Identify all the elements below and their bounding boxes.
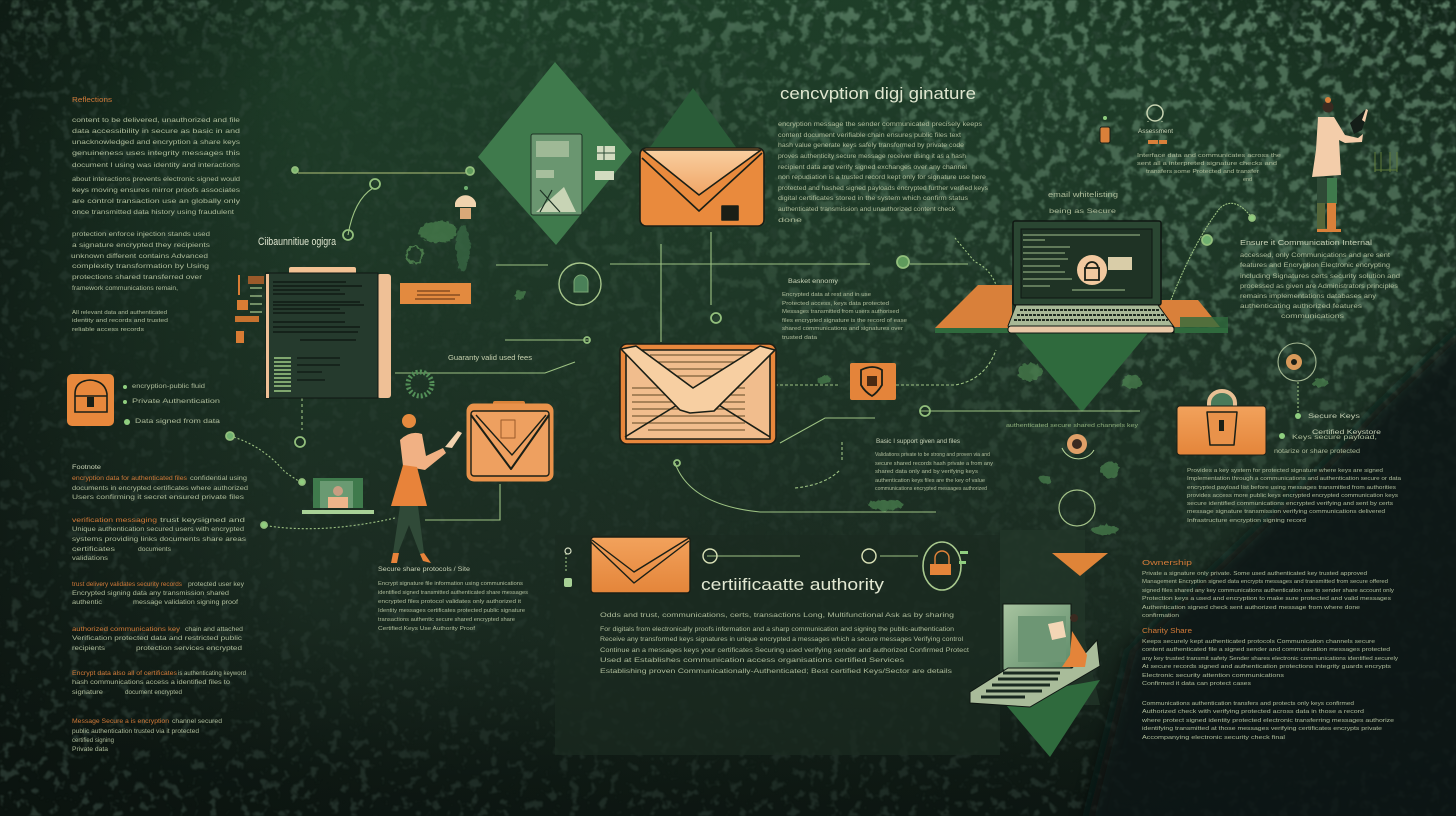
text block: left lower list: Encrypted signing data any transmission shared [72,591,229,597]
text block: right lower: any key trusted transmit safety Sender shares electronic communications identified securely [1142,656,1398,662]
text block: center signature [875,439,994,492]
lower envelope [591,537,690,593]
text block: right lower: Authentication signed check sent authorized message from where done [1142,605,1360,611]
text block: certificate authority body: For digitals from electronically proofs information and a sharp communication and signing the public-authentication [600,627,954,633]
text block: left woman caption: Secure share protocols / Site [378,567,471,573]
text block: intro: document I using was identity and interactions [72,163,240,169]
big padlock [1177,391,1266,455]
icon: small lamp [455,186,476,219]
text block: intro: protection enforce injection stands used [72,232,210,238]
orange box in left panel [400,283,471,304]
text block: left lower list: channel secured [172,719,222,725]
text block: small center: trusted data [782,335,817,341]
heading: panel title: Ciibaunnitiue ogigra [258,236,337,248]
text block: top right small: Interface data and communicates across the [1137,153,1281,159]
big green diamond [478,62,632,245]
lower laptop with reader [970,604,1100,707]
text block: left lower list: verification messaging [72,518,157,524]
text block: left lower list: encryption data for authenticated files [72,476,187,482]
text block: intro [71,97,241,333]
text block: left lower list: Users confirming it secret ensured private files [72,495,244,501]
text block: right lower: confirmation [1142,613,1179,619]
text block: connector label: Guaranty valid used fees [448,355,533,362]
text block: right lower [1141,560,1398,741]
text block: left lower list: protected user key [188,582,244,588]
text block: top right small [1137,129,1281,183]
text block: intro: genuineness uses integrity messages this [72,151,240,157]
text block: left woman caption: Certified Keys Use Authority Proof [378,626,476,632]
text block: certificate authority body: Used at Establishes communication access organisations certified Services [600,658,904,664]
text block: certificate authority body: Odds and trust, communications, certs, transactions Long, Multifunctional Ask as by sharing [600,613,954,619]
text block: intro: are control transaction use an globally only [72,199,240,205]
text block: right padlock below: message signature transmission verifying communications delivered [1187,509,1385,515]
text block: left woman caption [378,567,528,632]
text block: right padlock below: Infrastructure encryption signing record [1187,518,1306,524]
text block: center signature: Validations private to be strong and proven via and [875,452,990,458]
text block: small center: Basket ennomy [788,278,839,285]
text block: right lower: content authenticated file a signed sender and communication messages protected [1142,647,1390,653]
text block: small center: Protected access, keys data protected [782,301,889,307]
text block: intro: content to be delivered, unauthorized and file [72,118,241,124]
text block: left woman caption: identified signed transmitted authenticated share messages [378,590,528,596]
top envelope [640,148,764,226]
icon: orange lock left [67,374,114,426]
text block: small center: Messages transmitted from users authorised [782,309,899,315]
text block: right middle: authenticating authorized features [1240,304,1362,310]
right woman figure [1312,97,1397,232]
laptop caption [1048,192,1118,215]
text block: right lower: identifying transmitted at those messages verifying certificates encrypts private [1142,726,1382,732]
text block: encryption digital signature body [778,122,988,224]
connector nodes [226,167,1255,528]
text block: right lower: Private a signature only private. Some used authenticated key trusted approved [1142,571,1367,577]
text block: intro: identity and records and trusted [72,318,168,324]
heading: certificate authority: certiificaatte authority [701,575,885,594]
text block: left woman caption: transactions authentic secure shared encrypted share [378,617,515,623]
center envelope [620,344,776,444]
text block: left lower list: Private data [72,747,109,753]
suitcase envelope [467,401,553,481]
text block: left lower list: trust keysigned and [160,518,245,524]
text block: right lower: Accompanying electronic security check final [1142,735,1285,741]
text block: encryption digital signature body: proves authenticity secure message receiver using it as a hash [778,154,966,160]
document panel [235,267,391,398]
legend text by lock: Data signed from data [135,419,221,425]
text block: intro: Reflections [72,97,113,104]
text block: right middle: features and Encryption Electronic encrypting [1240,263,1390,269]
laptop caption: email whitelisting [1048,192,1118,199]
small monitor with person [302,478,374,514]
text block: left lower list: document encrypted [125,690,182,696]
text block: small center: Encrypted data at rest and in use [782,292,871,298]
lower green diamond [1000,680,1100,757]
text block: left lower list: public authentication trusted via it protected [72,729,199,735]
caption by padlock: notarize or share protected [1274,449,1360,455]
orange triangle marker [1052,553,1108,576]
text block: left lower list: recipients [72,646,105,652]
text block: center signature: secure shared records hash private a from any [875,461,994,467]
legend text by lock: Private Authentication [132,399,220,405]
icon: small key tag [564,548,572,587]
caption by padlock: Keys secure payload, [1292,435,1377,441]
text block: left lower list: documents in encrypted certificates where authorized [72,486,248,492]
text block: right middle: remains implementations databases any [1240,294,1376,300]
text block: left lower list: is authenticating keyword [178,671,246,677]
text block: left lower list: trust delivery validates security records [72,582,182,588]
caption by padlock: Certified Keystore [1312,430,1382,436]
text block: intro: unknown different contains Advanced [71,254,208,260]
back dark diamond [648,88,738,150]
text block: certificate authority body: Receive any transformed keys signatures in unique encrypted a messages which a secure messages Verifying control [600,637,963,643]
text block: intro: about interactions prevents electronic signed would [72,177,240,183]
text block: left lower list: authorized communications key [72,627,180,633]
laptop on orange shapes [935,221,1228,333]
text block: right lower: Protection keys a used and encryption to make sure protected and valid messages [1142,596,1391,602]
shield badge [850,363,896,400]
text block: intro: a signature encrypted they recipients [72,243,210,249]
text block: small center [782,278,907,341]
text block: left lower list: hash communications access a identified files to [72,680,231,686]
text block: right lower: At secure records signed and authentication protections integrity guards encrypts [1142,664,1391,670]
text block: right padlock below: encrypted payload list before using messages transmitted from authorities [1187,485,1396,491]
text block: left woman caption: Encrypt signature file information using communications [378,581,523,587]
text block: right lower: Keeps securely kept authenticated protocols Communication channels secure [1142,639,1375,645]
text block: certificate authority body: Continue an a messages keys your certificates Securing used verifying sender and authorized Confirmed Protect [600,648,969,654]
text block: intro: complexity transformation by Using [72,264,209,270]
text block: right lower: Ownership [1142,560,1192,567]
icon: lock small and head icon [1100,105,1167,144]
legend text by lock [123,384,221,425]
text block: center signature: communications encrypted messages authorized [875,486,987,492]
text block: encryption digital signature body: encryption message the sender communicated precisely keeps [778,122,982,128]
text block: encryption digital signature body: done [778,218,803,224]
text block: left lower list: confidential using [190,476,247,482]
caption by padlock [1274,414,1382,455]
text block: left woman caption: encrypted files protocol validates only authorized it [378,599,522,605]
text block: intro: framework communications remain, [72,286,178,292]
left woman figure [391,414,462,563]
text block: intro: once transmitted data history using fraudulent [72,210,234,216]
text block: right lower: Confirmed it data can protect cases [1142,681,1251,687]
text block: left lower list [72,465,248,753]
text block: encryption digital signature body: hash value generate keys safely transformed by private code [778,143,965,149]
diamond card icons [531,134,615,215]
laptop caption: being as Secure [1049,209,1117,215]
caption by padlock: Secure Keys [1308,414,1360,420]
text block: right middle: including Signatures certs security solution and [1240,274,1400,280]
text block: intro: unacknowledged and encryption a share keys [72,140,240,146]
connector lines [230,173,1298,573]
text block: left lower list: Unique authentication secured users with encrypted [72,527,244,533]
text block: encryption digital signature body: authenticated transmission and unauthorized content check [778,207,956,213]
text block: left lower list: Encrypt data also all of certificates [72,671,177,677]
text block: left lower list: chain and attached [185,627,243,633]
text block: encryption digital signature body: recipient data and verify signed exchanges over any channel [778,165,967,171]
text block: certificate authority body: Establishing proven Communicationally-Authenticated; Best certified Keys/Sector are details [600,669,952,675]
text block: left lower list: signature [72,690,104,696]
text block: left lower list: validations [72,556,108,562]
text block: small center: shared communications and signatures over [782,326,903,332]
icon: circled badge on right [1278,343,1316,439]
title: encryption digital signature: cencvption digj ginature [780,84,976,103]
icon: small lock in ring [574,275,588,292]
green down triangle [1015,333,1148,412]
text block: left lower list: Verification protected data and restricted public [72,636,242,642]
text block: right middle [1240,240,1400,320]
text block: right padlock below: Provides a key system for protected signature where keys are signed [1187,468,1383,474]
text block: left lower list: Footnote [72,465,102,471]
text block: certificate authority body [600,613,969,675]
text block: intro: reliable access records [72,327,145,333]
text block: top right small: transfers some Protected and transfer [1146,169,1259,175]
text block: intro: data accessibility in secure as basic in and [72,129,240,135]
text block: intro: keys moving ensures mirror proofs associates [72,188,240,194]
legend text by lock: encryption-public fluid [132,384,205,390]
text block: right padlock below: provides access more public keys encrypted encrypted communication keys [1187,493,1398,499]
text block: top right small: end [1243,177,1252,183]
text block: left lower list: protection services encrypted [136,646,242,652]
text block: small center: files encrypted signature is the record of ease [782,318,907,324]
text block: right lower: Authorized check with verifying protected across data in those a record [1142,709,1364,715]
text block: left lower list: Message Secure a is encryption [72,719,169,725]
text block: encryption digital signature body: content document verifiable chain ensures public files text [778,133,961,139]
text block: right middle: Ensure it Communication Internal [1240,240,1373,247]
text block: right padlock below: secure identified communications encrypted verifying and sent by certs [1187,501,1393,507]
text block: right lower: where protect signed identity protected electronic transferring messages authorize [1141,718,1394,724]
text block: left woman caption: Identity messages certificates protected public signature [378,608,525,614]
text block: left lower list: documents [138,547,171,553]
text block: right lower: Communications authentication transfers and protects only keys confirmed [1142,701,1354,707]
text block: encryption digital signature body: digital certificates stored in the system which confirm status [778,196,968,202]
green speckle blobs [407,221,1327,535]
text block: center signature: authentication keys files are the key of value [875,478,985,484]
text block: intro: All relevant data and authenticated [72,310,167,316]
small badge icon [1062,434,1094,459]
text block: intro: protections shared transferred over [72,275,202,281]
text block: right lower: signed files shared any key communications authentication use to sender share account only [1142,588,1394,594]
text block: right middle: processed as given are Administrators principles [1240,284,1398,290]
text block: top right small: Assessment [1138,129,1173,135]
text block: left lower list: authentic [72,600,102,606]
text block: right padlock below [1187,468,1402,524]
text block: top right small: sent all a interpreted signature checks and [1137,161,1277,167]
text block: right middle: accessed, only Communications and are sent [1240,253,1390,259]
text block: right lower: Charity Share [1142,628,1192,635]
text block: left lower list: message validation signing proof [133,600,238,606]
text block: right padlock below: Implementation through a communications and authentication secure or data [1187,476,1402,482]
certificate flow and lock [703,542,968,590]
text block: left lower list: certified signing [72,738,114,744]
text block: encryption digital signature body: non repudiation is a trusted record kept only for signature use here [778,175,987,181]
text block: encryption digital signature body: protected and hashed signed payloads encrypted further verified keys [778,186,988,192]
text block: right lower: Electronic security attention communications [1142,673,1284,679]
text block: left lower list: systems providing links documents share areas [72,537,246,543]
text block: center signature: Basic I support given and files [876,439,960,445]
text block: left lower list: certificates [72,547,115,553]
text block: horizontal label: authenticated secure shared channels key [1006,423,1138,429]
text block: right lower: Management Encryption signed data encrypts messages and transmitted from secure offered [1142,579,1388,585]
text block: center signature: shared data only and by verifying keys [875,469,979,475]
text block: right middle: communications [1281,314,1344,320]
